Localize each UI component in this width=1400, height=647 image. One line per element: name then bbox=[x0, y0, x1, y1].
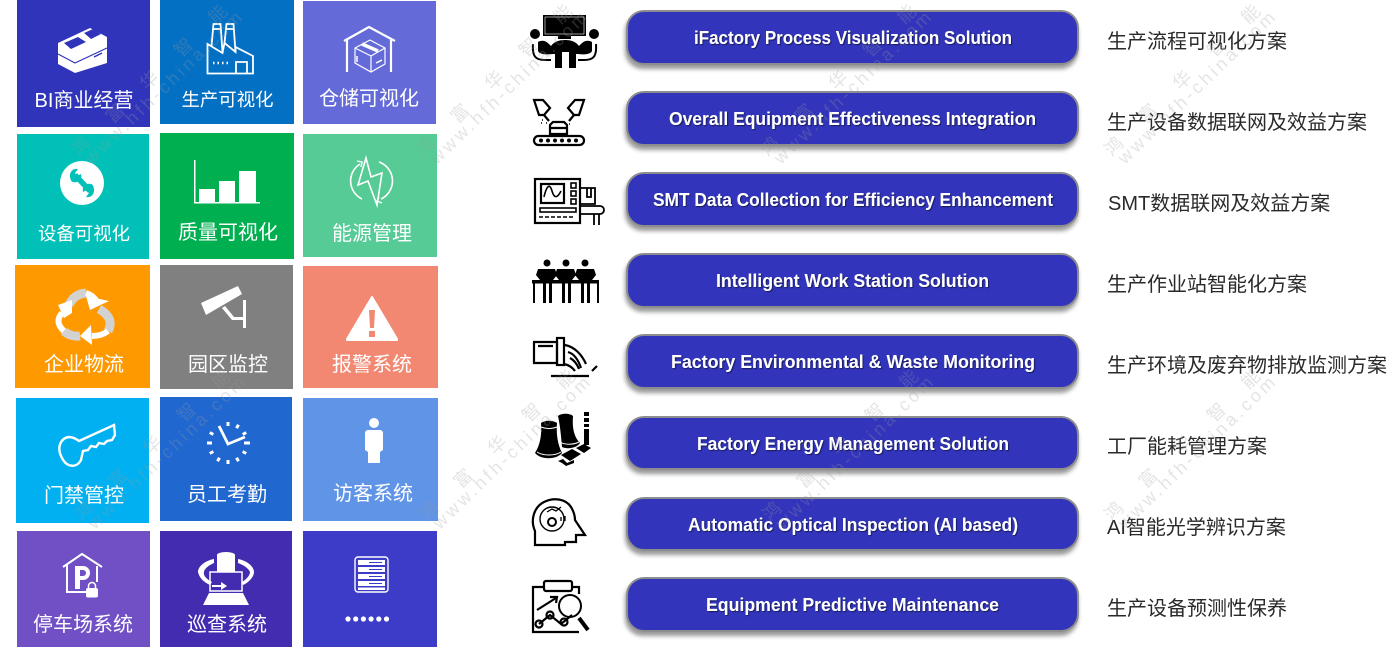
label: 生产设备数据联网及效益方案: 生产设备数据联网及效益方案 bbox=[1107, 111, 1367, 134]
watermarks: www.hfh-china.com bbox=[1113, 8, 1279, 169]
watermarks: www.hfh-china.com bbox=[425, 8, 591, 169]
watermarks bbox=[68, 0, 1279, 536]
pill: environment: Factory Environmental & Waste Monitoring bbox=[671, 352, 1035, 372]
tile: 生产可视化 bbox=[160, 0, 294, 124]
tile: 质量可视化 bbox=[160, 133, 294, 259]
pill: predictive maintenance bbox=[627, 578, 1078, 631]
icon: robot arms conveyor bbox=[534, 100, 584, 145]
icon: SMT machine bbox=[535, 179, 604, 225]
tile: 企业物流: 企业物流 bbox=[44, 353, 124, 376]
pill: AOI: Automatic Optical Inspection (AI based) bbox=[688, 515, 1018, 535]
tile: 生产可视化: 生产可视化 bbox=[182, 89, 273, 110]
icon: security camera bbox=[201, 286, 246, 328]
tile: 员工考勤 bbox=[160, 397, 292, 521]
tile: BI商业经营 bbox=[17, 0, 150, 127]
icon: person bbox=[365, 418, 383, 463]
icon: recycle arrows bbox=[58, 293, 110, 345]
icon: clipboard analysis bbox=[533, 581, 588, 632]
dots bbox=[345, 616, 389, 622]
tile: 设备可视化: 设备可视化 bbox=[38, 223, 130, 244]
tile: 企业物流 bbox=[15, 265, 150, 388]
tile: 巡查系统 bbox=[160, 531, 292, 647]
icon: warehouse box bbox=[344, 27, 395, 72]
tile: 访客系统 bbox=[303, 398, 438, 521]
tile: 访客系统: 访客系统 bbox=[333, 482, 413, 505]
icon: warning triangle bbox=[347, 297, 397, 340]
watermarks: 鸿 富 华 智 能 bbox=[757, 1, 920, 160]
icon: server rack bbox=[355, 557, 388, 592]
pill: work station bbox=[627, 254, 1078, 307]
watermarks: 鸿 富 华 智 能 bbox=[759, 366, 922, 525]
pill: OEE: Overall Equipment Effectiveness Integration bbox=[669, 109, 1036, 129]
panel: solution list bbox=[530, 11, 1387, 632]
label: SMT数据联网及效益方案: SMT数据联网及效益方案 bbox=[1108, 192, 1330, 215]
icon: parking house bbox=[63, 554, 102, 598]
watermarks: 鸿 富 华 智 能 bbox=[68, 1, 231, 160]
tile: 门禁管控: 门禁管控 bbox=[44, 484, 124, 507]
watermarks: www.hfh-china.com bbox=[80, 8, 246, 169]
watermarks: www.hfh-china.com bbox=[428, 373, 594, 534]
icon: factory bbox=[208, 24, 253, 74]
pill: predictive maintenance: Equipment Predictive Maintenance bbox=[706, 595, 999, 615]
watermarks: 鸿 富 华 智 能 bbox=[1101, 366, 1264, 525]
watermarks: 鸿 富 华 智 能 bbox=[413, 1, 576, 160]
watermarks: 鸿 富 华 智 能 bbox=[71, 366, 234, 525]
watermarks: 鸿 富 华 智 能 bbox=[1101, 1, 1264, 160]
icon: clock bbox=[207, 422, 250, 464]
tile: 门禁管控 bbox=[16, 398, 149, 523]
pill: energy bbox=[627, 417, 1078, 469]
tile: BI商业经营: BI商业经营 bbox=[35, 89, 133, 112]
pill: SMT bbox=[627, 173, 1078, 226]
tile: more systems bbox=[303, 531, 437, 647]
tile: 报警系统: 报警系统 bbox=[332, 353, 412, 376]
tile: 质量可视化: 质量可视化 bbox=[178, 221, 278, 244]
pill: energy: Factory Energy Management Solution bbox=[697, 434, 1009, 454]
watermarks: www.hfh-china.com bbox=[1113, 373, 1279, 534]
label: AI智能光学辨识方案: AI智能光学辨识方案 bbox=[1107, 516, 1286, 539]
icon: inspection laptop bbox=[198, 552, 254, 605]
tile: 仓储可视化 bbox=[303, 1, 436, 124]
icon: energy bolt bbox=[351, 158, 392, 205]
pill: iFactory bbox=[627, 11, 1078, 64]
tile: 设备可视化 bbox=[17, 134, 149, 259]
icon: work station bbox=[532, 260, 599, 303]
tile: 能源管理: 能源管理 bbox=[332, 222, 412, 245]
icon: AI head bbox=[533, 499, 585, 545]
tile: 停车场系统: 停车场系统 bbox=[33, 613, 133, 636]
tile: 停车场系统 bbox=[17, 531, 150, 647]
tile: 报警系统 bbox=[303, 266, 438, 388]
watermarks: www.hfh-china.com bbox=[769, 8, 935, 169]
pill: iFactory: iFactory Process Visualization Solution bbox=[694, 28, 1012, 48]
tile: 能源管理 bbox=[303, 134, 437, 257]
tile: 巡查系统: 巡查系统 bbox=[187, 613, 267, 636]
label: 生产设备预测性保养: 生产设备预测性保养 bbox=[1107, 597, 1287, 620]
icon: waste pipe bbox=[534, 338, 597, 376]
pill: SMT: SMT Data Collection for Efficiency Enhancement bbox=[653, 190, 1053, 210]
watermarks: 鸿 富 华 智 能 bbox=[416, 366, 579, 525]
icon: wrench bbox=[60, 161, 104, 205]
watermarks: www.hfh-china.com bbox=[771, 373, 937, 534]
panel: module tile grid bbox=[15, 0, 438, 647]
tile: 园区监控: 园区监控 bbox=[188, 353, 268, 376]
pill: OEE bbox=[627, 92, 1078, 145]
icon: key bbox=[59, 425, 115, 466]
icon: visualization meeting bbox=[530, 15, 599, 68]
tile: 员工考勤: 员工考勤 bbox=[187, 483, 267, 506]
label: 生产流程可视化方案: 生产流程可视化方案 bbox=[1107, 30, 1287, 53]
icon: cooling towers bbox=[535, 412, 591, 466]
pill: AOI bbox=[627, 498, 1078, 550]
pill: environment bbox=[627, 335, 1078, 388]
label: 工厂能耗管理方案: 工厂能耗管理方案 bbox=[1107, 435, 1267, 458]
watermarks: www.hfh-china.com bbox=[83, 373, 249, 534]
pill: work station: Intelligent Work Station Solution bbox=[716, 271, 989, 291]
tile: 园区监控 bbox=[160, 265, 293, 389]
tile: 仓储可视化: 仓储可视化 bbox=[319, 87, 419, 110]
label: 生产作业站智能化方案: 生产作业站智能化方案 bbox=[1107, 273, 1307, 296]
icon: money stacks bbox=[58, 28, 107, 73]
label: 生产环境及废弃物排放监测方案: 生产环境及废弃物排放监测方案 bbox=[1107, 354, 1387, 377]
icon: bar chart bbox=[194, 160, 260, 204]
